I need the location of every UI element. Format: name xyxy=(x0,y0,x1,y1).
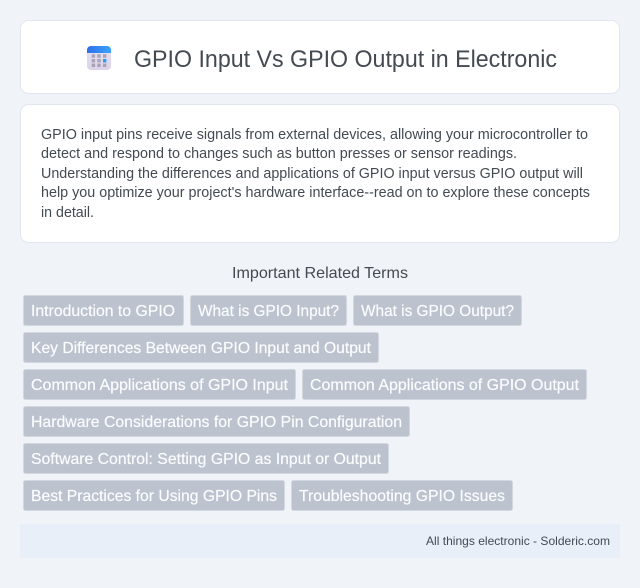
tag: introduction: Introduction to GPIO xyxy=(31,303,175,320)
tag: gpio output: What is GPIO Output? xyxy=(361,303,514,320)
tag: software control xyxy=(24,444,388,474)
tag: applications output: Common Applications of GPIO Output xyxy=(310,377,580,394)
intro text panel: in detail. xyxy=(41,205,94,221)
intro text panel: Understanding the differences and applications of GPIO input versus GPIO output will xyxy=(41,166,583,182)
intro text panel xyxy=(20,104,620,242)
header panel xyxy=(20,20,620,94)
tag: software control: Software Control: Setting GPIO as Input or Output xyxy=(31,451,382,468)
intro text panel: help you optimize your project's hardware interface--read on to explore these concepts xyxy=(41,185,590,201)
tag: troubleshooting: Troubleshooting GPIO Issues xyxy=(299,488,505,505)
tag: gpio input: What is GPIO Input? xyxy=(198,303,339,320)
tag: hardware considerations: Hardware Considerations for GPIO Pin Configuration xyxy=(31,414,402,431)
tag: hardware considerations xyxy=(24,406,410,436)
tag: applications input: Common Applications of GPIO Input xyxy=(31,377,289,394)
footer: All things electronic - Solderic.com xyxy=(426,534,610,548)
tag: gpio output xyxy=(354,296,522,326)
tag: introduction xyxy=(24,296,184,326)
tag: applications output xyxy=(302,370,586,400)
footer xyxy=(20,524,620,558)
tag: key differences xyxy=(24,332,378,362)
tag: best practices: Best Practices for Using GPIO Pins xyxy=(31,488,277,505)
intro text panel: detect and respond to changes such as button presses or sensor readings. xyxy=(41,146,517,162)
tag list xyxy=(24,296,586,510)
tag: troubleshooting xyxy=(292,480,512,510)
heading: important related terms: Important Related Terms xyxy=(232,265,408,282)
intro text panel: GPIO input pins receive signals from external devices, allowing your microcontroller to xyxy=(41,127,588,143)
tag: key differences: Key Differences Between GPIO Input and Output xyxy=(31,340,372,357)
tag: applications input xyxy=(24,370,296,400)
title: GPIO Input Vs GPIO Output in Electronic xyxy=(134,46,557,73)
icon: calendar xyxy=(87,46,111,70)
tag: gpio input xyxy=(190,296,346,326)
tag: best practices xyxy=(24,480,284,510)
